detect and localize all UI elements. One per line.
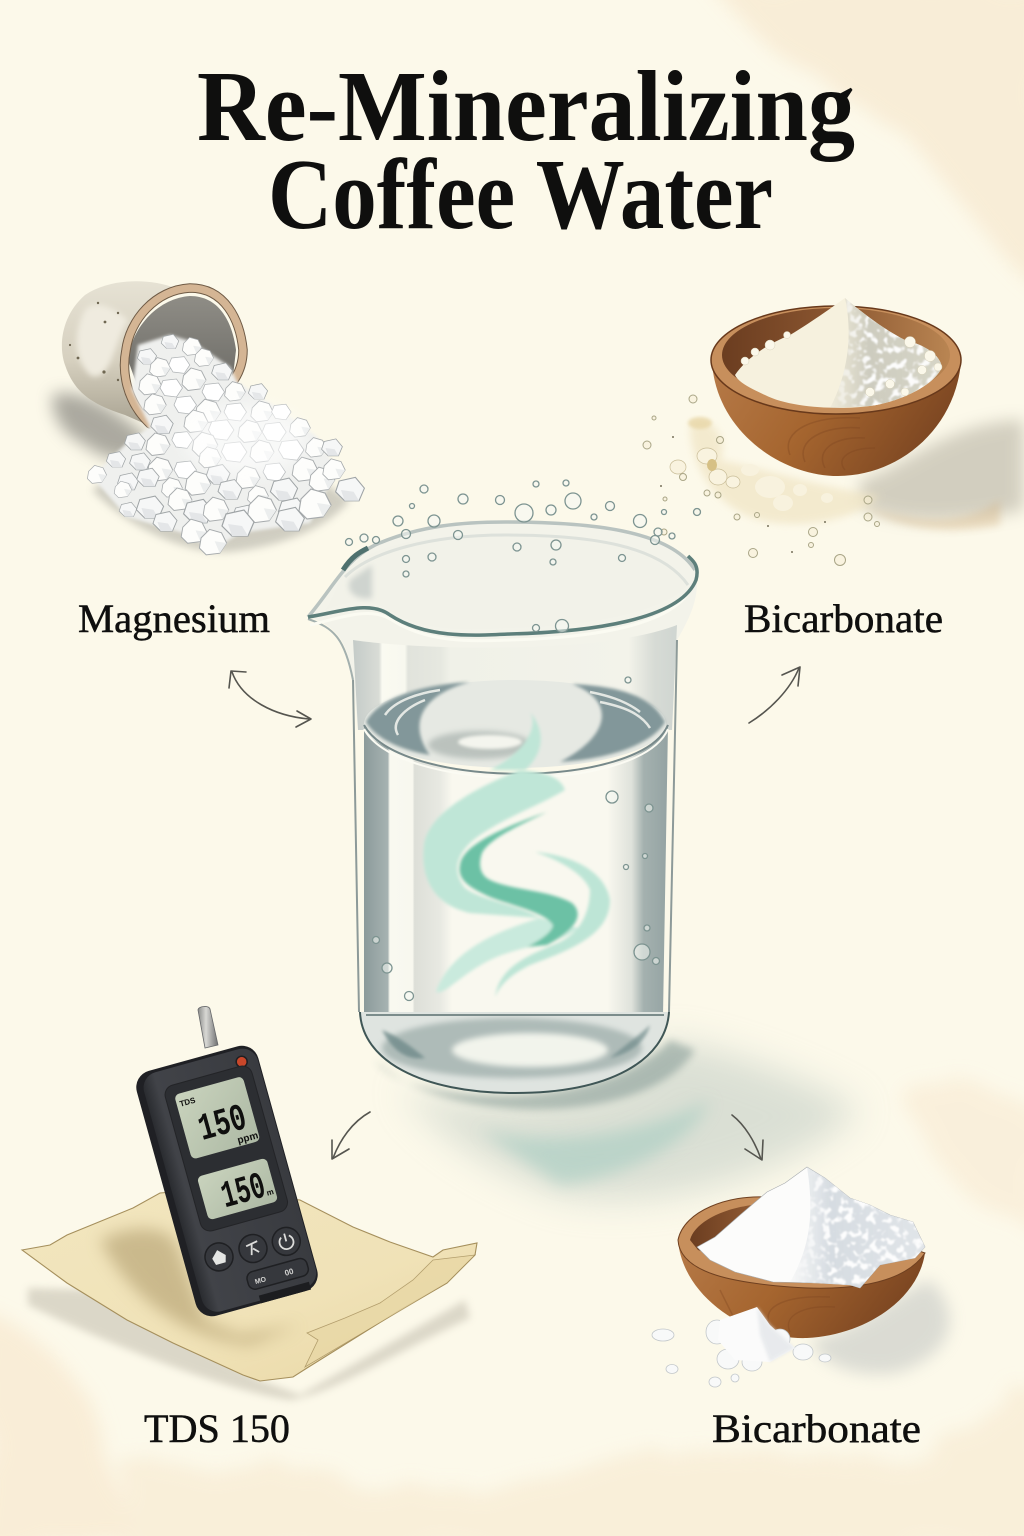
screen bezel <box>163 1064 290 1233</box>
cup cast shadow <box>52 393 150 459</box>
rim <box>308 522 695 617</box>
meter body <box>132 1042 322 1320</box>
salt crystals <box>87 334 364 555</box>
lower strand <box>436 918 578 992</box>
water side edges <box>373 760 379 1000</box>
title: Re-Mineralizing <box>197 50 855 162</box>
bowl shadow <box>810 1280 950 1374</box>
body outline <box>353 640 677 1012</box>
right strand <box>495 852 610 997</box>
cream powder pile <box>735 298 942 408</box>
white powder pile <box>697 1167 925 1288</box>
bottom port <box>259 1282 311 1303</box>
upper LCD: ppm <box>236 1130 260 1146</box>
parchment sheet <box>22 1190 477 1381</box>
buttons <box>202 1221 310 1300</box>
salt highlight <box>185 405 305 475</box>
status LED <box>235 1055 248 1069</box>
illustration: torn parchment under meter <box>22 1190 477 1400</box>
bowl shadow <box>860 420 1024 521</box>
illustration: spilled magnesium salt cup <box>52 281 364 555</box>
arrow: to TDS meter <box>332 1112 370 1159</box>
upper LCD <box>174 1076 260 1160</box>
parchment cast shadow <box>28 1288 470 1400</box>
glass above water <box>308 522 697 730</box>
lower LCD <box>197 1158 279 1224</box>
label: Magnesium: Magnesium <box>78 596 270 641</box>
bowl body <box>712 362 961 476</box>
cup interior <box>128 296 236 422</box>
button icons <box>210 1230 302 1295</box>
upper LCD: 150 <box>194 1097 252 1152</box>
arrow: Magnesium two-way <box>229 671 311 727</box>
meter shadow on paper <box>100 1229 300 1345</box>
illustration: glass beaker <box>308 480 860 1200</box>
label: Bicarbonate bottom: Bicarbonate <box>712 1406 921 1451</box>
spilled powder stain <box>690 421 880 524</box>
water surface <box>364 680 666 768</box>
surface swirl top <box>490 712 541 770</box>
arrow: to Bicarbonate top <box>749 667 800 723</box>
water body <box>364 725 668 1015</box>
title <box>197 50 855 250</box>
bowl body <box>678 1240 925 1338</box>
beaker cast shadow <box>400 1040 860 1200</box>
pile cast shadow <box>92 470 350 552</box>
cup rim <box>125 288 243 424</box>
salt pile base <box>92 335 337 550</box>
spilled powder and grains <box>643 395 880 566</box>
bubbles <box>346 480 700 1000</box>
cup body <box>62 281 175 426</box>
lower LCD: m <box>266 1187 275 1198</box>
base of glass <box>360 1012 669 1093</box>
illustration: wooden bowl of bicarbonate powder, top right <box>643 298 1024 566</box>
label: Bicarbonate top: Bicarbonate <box>744 596 943 641</box>
lower LCD: 150 <box>217 1166 271 1219</box>
dark core band <box>460 812 578 947</box>
spilled powder <box>652 1307 831 1387</box>
illustration: wooden bowl of white bicarbonate, bottom right <box>652 1167 950 1387</box>
button icons: 00 <box>284 1267 295 1278</box>
parchment fold <box>305 1255 475 1367</box>
arrow: to Bicarbonate bottom <box>732 1115 763 1160</box>
teal mineral swirl <box>423 770 610 997</box>
title: Coffee Water <box>268 138 773 250</box>
illustration: TDS meter <box>132 1006 322 1320</box>
button icons: MO <box>254 1276 268 1286</box>
label: TDS 150: TDS 150 <box>144 1406 290 1451</box>
light main band <box>423 770 565 918</box>
upper LCD: TDS <box>179 1096 197 1109</box>
probe <box>198 1006 218 1048</box>
